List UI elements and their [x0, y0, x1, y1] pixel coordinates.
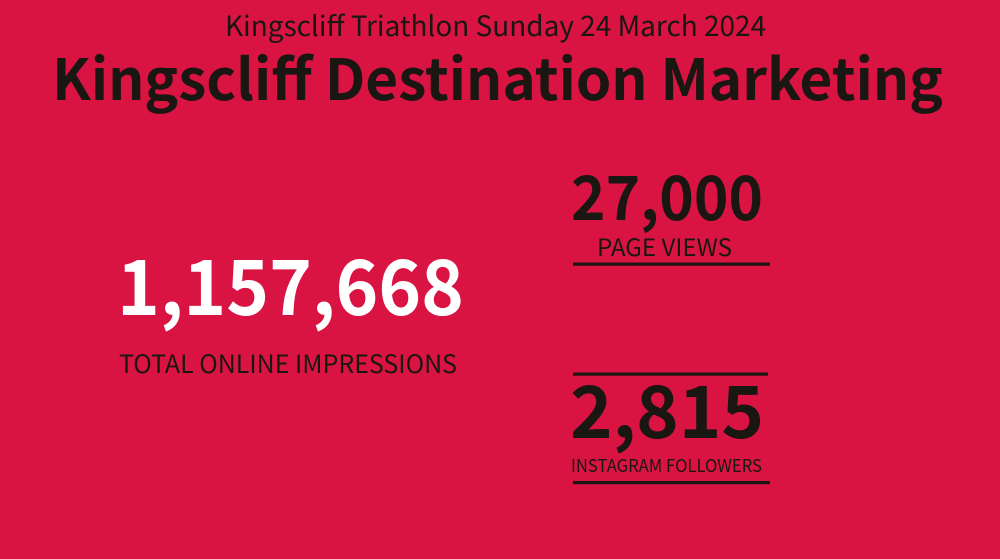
page views underline: [573, 262, 770, 266]
instagram underline: [573, 481, 770, 484]
metric: total online impressions: [117, 227, 464, 381]
total impressions number: 1,157,668: [117, 227, 464, 337]
page views label: PAGE VIEWS: [597, 228, 732, 263]
instagram top rule: [573, 372, 768, 376]
instagram number: 2,815: [570, 354, 764, 459]
subtitle: Kingscliff Triathlon Sunday 24 March 2024: [225, 5, 766, 45]
page views number: 27,000: [571, 149, 763, 238]
title: Kingscliff Destination Marketing: [52, 35, 943, 117]
metric: page views: [571, 149, 770, 266]
instagram label: INSTAGRAM FOLLOWERS: [571, 452, 762, 478]
total impressions label: TOTAL ONLINE IMPRESSIONS: [119, 345, 457, 381]
metric: instagram followers: [570, 354, 770, 484]
